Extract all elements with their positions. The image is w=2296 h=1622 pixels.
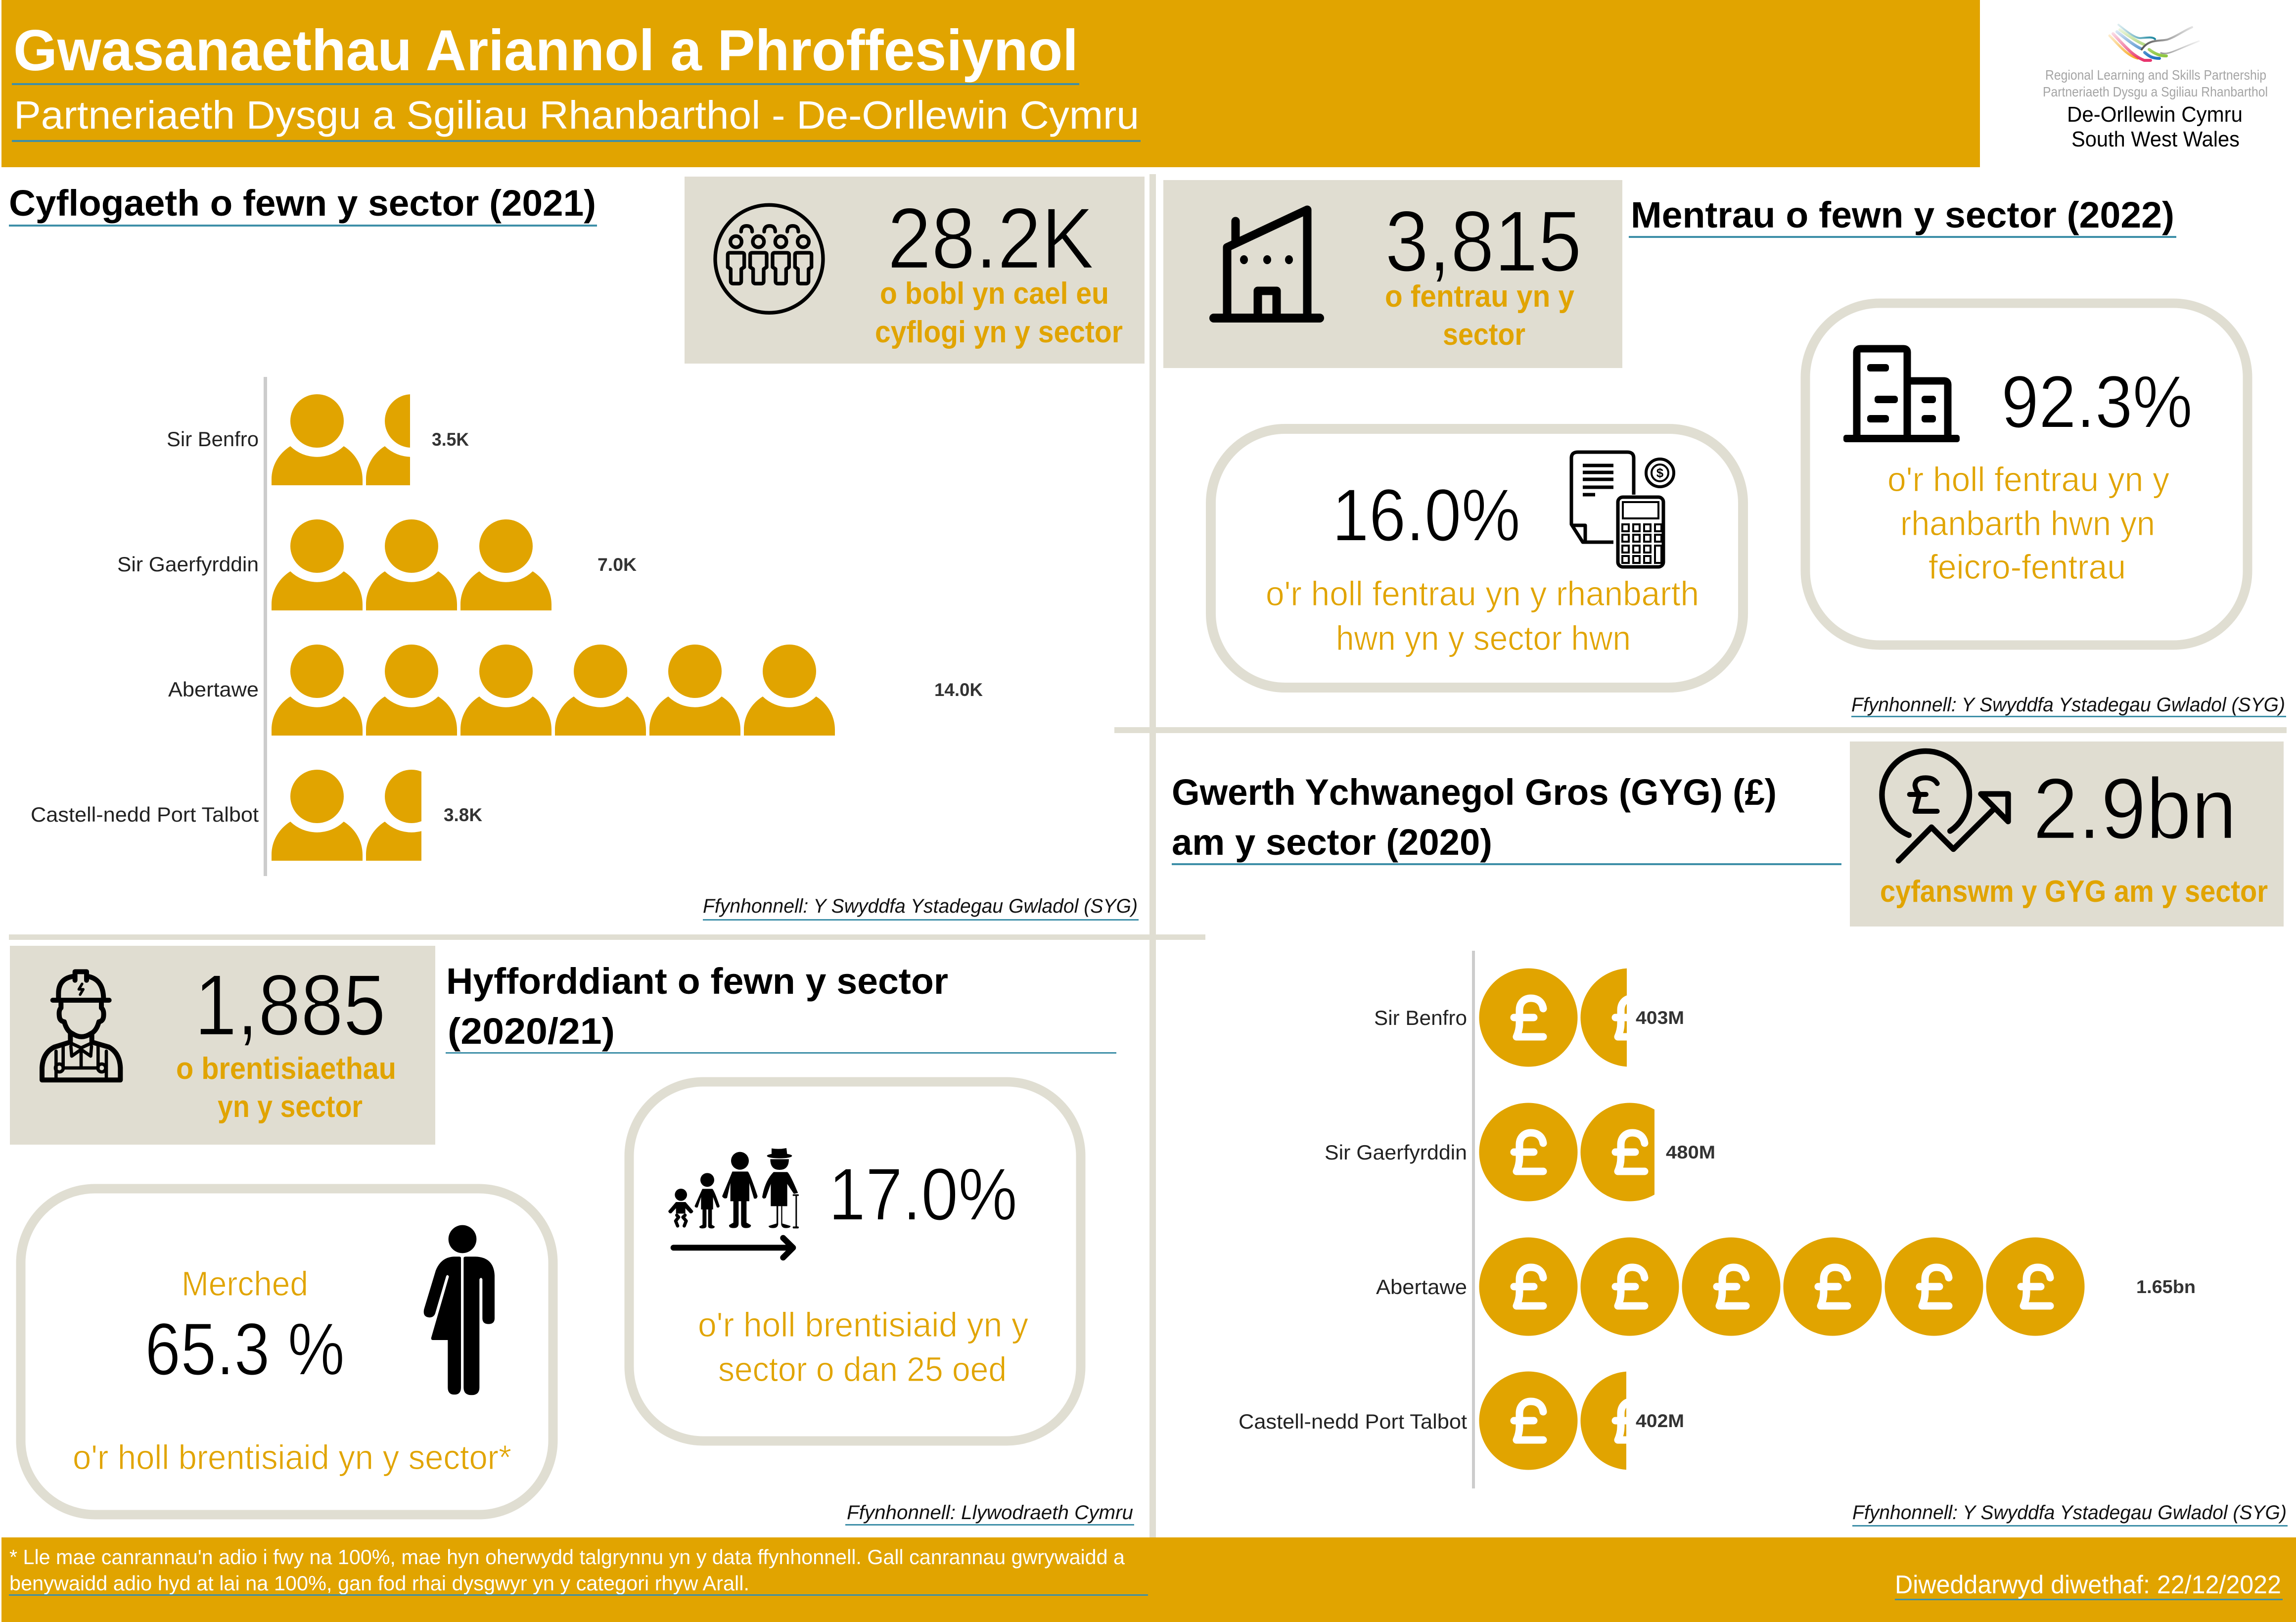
row: Abertawe: 14.0K: [934, 680, 983, 700]
row: Castell-nedd Port Talbot: [1239, 1371, 1684, 1470]
callout: 16.0%: [1211, 429, 1743, 688]
footnote: * Lle mae canrannau'n adio i fwy na 100%, mae hyn oherwydd talgrynnu yn y data ffynhonnell. Gall canrannau gwrywaidd a: [9, 1545, 1125, 1569]
panel: employment: [9, 177, 1145, 921]
footnote: benywaidd adio hyd at lai na 100%, gan fod rhai dysgwyr yn y categori rhyw Arall.: [9, 1572, 749, 1595]
row: Sir Benfro: 403M: [1636, 1008, 1684, 1028]
caption: [176, 1052, 396, 1124]
row: Sir Benfro: [167, 394, 469, 485]
row: Abertawe: [1376, 1238, 2196, 1336]
row: Sir Gaerfyrddin: Sir Gaerfyrddin: [117, 553, 259, 576]
header banner: [1, 0, 1980, 167]
KPI box: apprenticeships: [10, 946, 435, 1145]
logo text: De-Orllewin Cymru: [2067, 102, 2243, 127]
label: Merched: Merched: [182, 1264, 308, 1303]
chart: employment by area: [31, 377, 983, 876]
heading: GVA: am y sector (2020): [1172, 822, 1492, 863]
KPI box: people employed: [685, 177, 1145, 364]
icon: invoice and calculator: $: [1656, 465, 1664, 480]
caption: o'r holl brentisiaid yn y sector*: [73, 1438, 511, 1477]
number: 3,815: [1385, 193, 1582, 290]
source: Ffynhonnell: Llywodraeth Cymru: [847, 1502, 1133, 1524]
caption: rhanbarth hwn yn: [1900, 504, 2155, 543]
heading: training: [446, 961, 1116, 1054]
number: 16.0%: [1332, 473, 1520, 556]
caption: [1887, 460, 2169, 586]
caption: feicro-fentrau: [1929, 548, 2126, 586]
row: Castell-nedd Port Talbot: 3.8K: [444, 805, 482, 825]
subtitle: Partneriaeth Dysgu a Sgiliau Rhanbarthol - De-Orllewin Cymru: [14, 93, 1139, 137]
footer banner: [1, 1537, 2296, 1622]
caption: o'r holl fentrau yn y: [1887, 460, 2169, 499]
caption: o fentrau yn y: [1385, 279, 1574, 314]
caption: hwn yn y sector hwn: [1336, 619, 1631, 657]
row: Castell-nedd Port Talbot: Castell-nedd Port Talbot: [1239, 1410, 1467, 1433]
KPI box: total GVA: [1850, 741, 2284, 927]
caption: sector o dan 25 oed: [718, 1350, 1007, 1389]
source: Ffynhonnell: Y Swyddfa Ystadegau Gwladol (SYG): [1852, 1502, 2287, 1524]
row: Sir Gaerfyrddin: 7.0K: [597, 555, 637, 575]
row: Abertawe: Abertawe: [1376, 1275, 1467, 1298]
caption: o'r holl brentisiaid yn y: [698, 1305, 1028, 1344]
number: 2.9bn: [2033, 761, 2237, 857]
panel: GVA: [1172, 741, 2288, 1527]
caption: [875, 277, 1123, 349]
row: Castell-nedd Port Talbot: Castell-nedd Port Talbot: [31, 803, 259, 826]
footnote: [9, 1545, 1148, 1596]
caption: [1385, 279, 1574, 352]
row: Sir Benfro: Sir Benfro: [1374, 1006, 1467, 1029]
icon: office buildings: [1843, 349, 1960, 442]
number: 65.3 %: [145, 1307, 345, 1390]
caption: cyflogi yn y sector: [875, 315, 1123, 349]
caption: [698, 1305, 1028, 1389]
logo: South West Wales partnership: [2043, 25, 2268, 151]
KPI box: enterprises: [1163, 180, 1622, 368]
heading: training: (2020/21): [448, 1011, 615, 1052]
source: Ffynhonnell: Y Swyddfa Ystadegau Gwladol (SYG): [1851, 694, 2285, 716]
logo text: [2043, 67, 2268, 151]
icon: building: [1209, 210, 1324, 323]
logo text: South West Wales: [2071, 127, 2240, 151]
last updated: Diweddarwyd diwethaf: 22/12/2022: [1895, 1571, 2281, 1599]
icon: pound and rising arrow: [1882, 751, 2008, 861]
row: Abertawe: 1.65bn: [2136, 1277, 2196, 1297]
number: 17.0%: [828, 1153, 1017, 1236]
row: Sir Gaerfyrddin: [1325, 1103, 1715, 1201]
panel: training: [10, 946, 1134, 1526]
panel: enterprises: [1163, 180, 2286, 717]
row: Castell-nedd Port Talbot: 402M: [1636, 1411, 1684, 1431]
row: Sir Gaerfyrddin: Sir Gaerfyrddin: [1325, 1141, 1467, 1164]
caption: o bobl yn cael eu: [880, 277, 1109, 311]
caption: o brentisiaethau: [176, 1052, 396, 1086]
caption: o'r holl fentrau yn y rhanbarth: [1266, 574, 1699, 613]
icon: female figure: [424, 1225, 495, 1395]
heading: employment: Cyflogaeth o fewn y sector (2021): [9, 183, 596, 224]
row: Sir Benfro: [1374, 969, 1684, 1066]
icon: construction worker: [42, 972, 120, 1080]
row: Sir Gaerfyrddin: [117, 519, 637, 610]
icon: people by age with arrow: [668, 1148, 799, 1257]
row: Castell-nedd Port Talbot: [31, 770, 482, 861]
number: 28.2K: [887, 190, 1094, 287]
heading: GVA: Gwerth Ychwanegol Gros (GYG) (£): [1172, 772, 1777, 813]
heading: training: Hyfforddiant o fewn y sector: [446, 961, 948, 1002]
row: Abertawe: [168, 645, 983, 736]
icon: invoice and calculator: [1571, 452, 1674, 567]
callout: women 65.3%: [21, 1189, 553, 1515]
heading: enterprises: Mentrau o fewn y sector (2022): [1631, 194, 2174, 235]
icon: group of people: [715, 205, 823, 313]
number: 1,885: [194, 957, 386, 1054]
callout: 92.3%: [1805, 303, 2248, 645]
title: Gwasanaethau Ariannol a Phroffesiynol: [13, 18, 1078, 83]
chart: GVA by area: [1239, 951, 2196, 1488]
row: Sir Gaerfyrddin: 480M: [1666, 1142, 1715, 1162]
logo text: Regional Learning and Skills Partnership: [2045, 67, 2266, 83]
caption: [1266, 574, 1699, 657]
logo text: Partneriaeth Dysgu a Sgiliau Rhanbarthol: [2043, 84, 2268, 99]
heading: GVA: [1172, 772, 1841, 865]
row: Abertawe: Abertawe: [168, 678, 259, 701]
source: Ffynhonnell: Y Swyddfa Ystadegau Gwladol (SYG): [703, 895, 1138, 917]
row: Sir Benfro: Sir Benfro: [167, 427, 259, 451]
icon: swoosh: [2110, 25, 2199, 60]
caption: sector: [1443, 318, 1525, 352]
number: 92.3%: [2001, 360, 2193, 443]
row: Sir Benfro: 3.5K: [432, 429, 469, 450]
caption: yn y sector: [218, 1090, 363, 1124]
callout: under 25s 17.0%: [629, 1082, 1081, 1441]
